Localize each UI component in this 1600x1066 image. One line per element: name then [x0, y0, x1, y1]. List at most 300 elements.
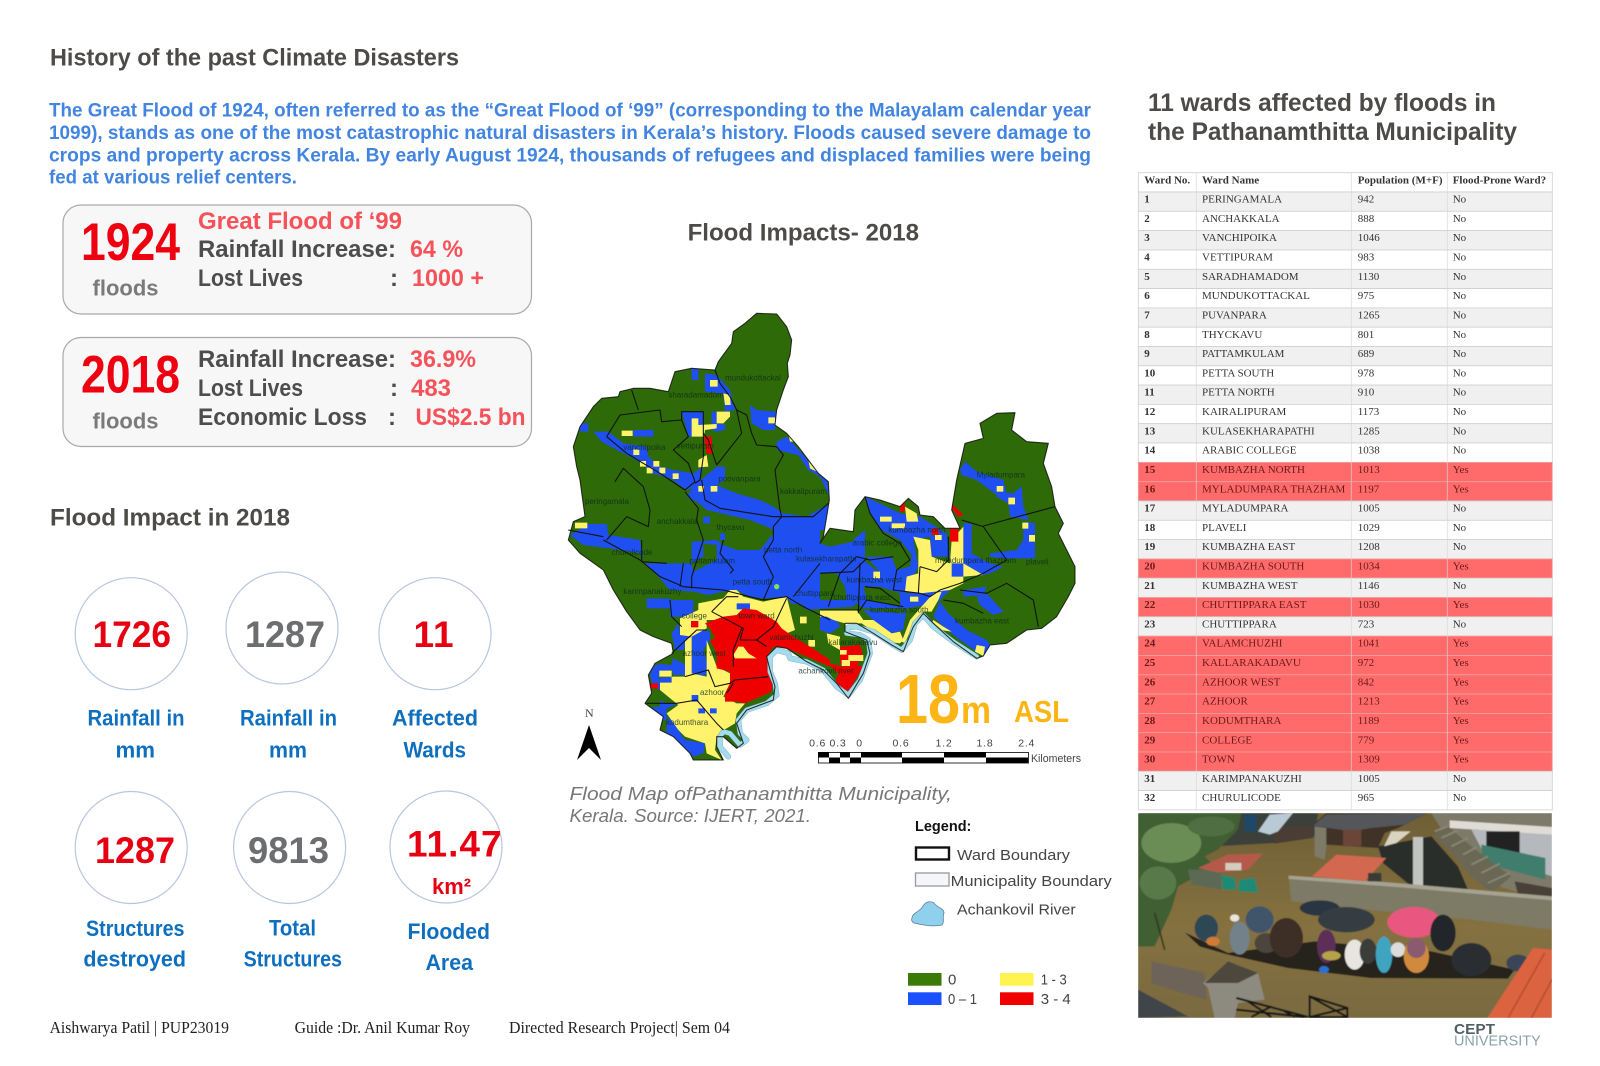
- panel: 2018 floods: :: [390, 375, 398, 402]
- row: ward 31: No: [1453, 773, 1467, 785]
- row: ward 1: No: [1453, 194, 1467, 206]
- row: ward 2: No: [1453, 213, 1467, 225]
- row: ward 12: No: [1453, 406, 1467, 418]
- legend: map symbols: Legend:: [915, 819, 971, 835]
- map: ward labels: chuttippara east: [833, 593, 891, 602]
- row: ward 20: [1138, 559, 1552, 578]
- heading: 11 wards affected: 11 wards affected by floods in: [1148, 89, 1496, 117]
- panel: 1924 floods: floods: [92, 276, 158, 300]
- map: ward labels: vanchipoika: [623, 443, 666, 452]
- logo: CEPT University: CEPT: [1454, 1021, 1495, 1038]
- map: ward labels: azhoor west: [683, 649, 726, 658]
- row: ward 32: CHURULICODE: [1202, 792, 1281, 804]
- row: ward 21: 21: [1144, 580, 1155, 592]
- row: ward 17: MYLADUMPARA: [1202, 503, 1288, 515]
- row: ward 20: 1034: [1358, 561, 1380, 573]
- row: ward 9: [1138, 346, 1552, 366]
- text block: great flood intro paragraph: The Great Flood of 1924, often referred to as the “Great Flood of ‘99” (corresponding to the Malayalam calendar year: [49, 101, 1092, 122]
- row: ward 26: 842: [1358, 676, 1374, 688]
- map: ward labels: plaveli: [1026, 558, 1049, 567]
- stat: flooded area 11.47: Area: [426, 950, 474, 975]
- icon: north arrow: [577, 706, 601, 760]
- row: ward 16: [1138, 482, 1552, 501]
- row: ward 18: PLAVELI: [1202, 522, 1247, 534]
- row: ward 1: PERINGAMALA: [1202, 194, 1282, 206]
- legend item: municipality boundary: Municipality Boundary: [951, 873, 1112, 890]
- stat: total structures 9813: Total: [269, 916, 316, 940]
- map layer: 1-3 m yellow: [575, 380, 1035, 760]
- map: ward labels: kumbazha south: [870, 605, 929, 614]
- row: ward 11: No: [1453, 387, 1467, 399]
- row: ward 7: PUVANPARA: [1202, 309, 1267, 321]
- table: ward flood-prone status: [1138, 173, 1552, 810]
- map: ward labels: kulasekharapathi: [796, 555, 857, 564]
- map: ward labels: Myladumpara: [977, 470, 1026, 479]
- row: ward 3: No: [1453, 232, 1467, 244]
- row: ward 26: 26: [1144, 676, 1156, 688]
- map layer: 0-1 m blue: [570, 368, 1035, 757]
- row: ward 2: [1138, 211, 1552, 231]
- legend item: depth classes: 0 – 1: [948, 991, 977, 1008]
- row: ward 8: 801: [1358, 329, 1374, 341]
- row: ward 8: No: [1453, 329, 1467, 341]
- map: ward labels: karimpanakuzhy: [623, 587, 681, 596]
- row: ward 21: [1138, 578, 1552, 598]
- row: ward 32: No: [1453, 792, 1467, 804]
- row: ward 7: 1265: [1358, 309, 1380, 321]
- scale bar: 0.6: [809, 738, 826, 750]
- map: ward labels: valamchuzhi: [769, 633, 814, 642]
- row: ward 25: 972: [1358, 657, 1374, 669]
- row: ward 29: COLLEGE: [1202, 734, 1252, 746]
- row: ward 15: 15: [1144, 464, 1156, 476]
- row: ward 19: 1208: [1358, 541, 1380, 553]
- row: ward 13: KULASEKHARAPATHI: [1202, 425, 1315, 437]
- map: ward labels: kallarakadavu: [828, 638, 878, 647]
- map: flood depth layers: [560, 300, 1093, 767]
- row: ward 27: 1213: [1358, 696, 1380, 708]
- legend item: achankovil river: [912, 901, 1076, 926]
- logo: CEPT University: [1454, 1021, 1541, 1050]
- stat: structures destroyed 1287: 1287: [95, 830, 175, 871]
- map: ward labels: azhoor: [700, 688, 725, 697]
- row: ward 23: [1138, 617, 1552, 636]
- row: ward 31: [1138, 771, 1552, 791]
- row: ward 18: No: [1453, 522, 1467, 534]
- row: ward 17: No: [1453, 503, 1467, 515]
- stat: affected wards 11: Wards: [404, 738, 466, 763]
- row: ward 28: KODUMTHARA: [1202, 715, 1282, 727]
- panel: 2018 floods: Lost Lives: [198, 375, 303, 402]
- panel: 2018 floods: Economic Loss: [198, 404, 367, 431]
- map: ward labels: anchakkala: [657, 517, 698, 526]
- row: ward 20: Yes: [1453, 561, 1469, 573]
- row: ward 2: ANCHAKKALA: [1202, 213, 1280, 225]
- row: ward 30: TOWN: [1202, 754, 1235, 766]
- map: ward labels: kakkalipuram: [780, 487, 827, 496]
- row: ward 14: 1038: [1358, 445, 1380, 457]
- map: blue cells over yellow: [660, 563, 963, 713]
- panel: 2018 floods: 2018: [81, 346, 180, 405]
- footer credits: Directed Research Project| Sem 04: [509, 1018, 730, 1037]
- row: ward 27: Yes: [1453, 696, 1469, 708]
- row: ward 23: CHUTTIPPARA: [1202, 618, 1277, 630]
- row: ward 21: No: [1453, 580, 1467, 592]
- map: ward labels: college: [682, 612, 708, 621]
- row: ward 30: 1309: [1358, 754, 1380, 766]
- row: ward 7: 7: [1144, 309, 1150, 321]
- row: ward 5: 5: [1144, 271, 1150, 283]
- legend item: ward boundary: Ward Boundary: [957, 847, 1071, 864]
- panel: 2018 floods: floods: [92, 408, 158, 434]
- legend item: depth classes: [908, 971, 1071, 1008]
- row: ward 4: [1138, 250, 1552, 269]
- legend item: depth classes: 1 - 3: [1041, 971, 1067, 988]
- map: ward labels: vettipuram: [677, 441, 714, 450]
- row: ward 22: Yes: [1453, 599, 1469, 611]
- heading: 11 wards affected: the Pathanamthitta Municipality: [1148, 118, 1517, 146]
- row: ward 16: 16: [1144, 483, 1156, 495]
- map layer: 3-4 m red: [650, 437, 963, 703]
- row: ward 24: 1041: [1358, 638, 1380, 650]
- table header: Ward No.: [1144, 174, 1190, 186]
- heading: 11 wards affected: [1148, 89, 1517, 146]
- map: ward labels: churulicode: [612, 548, 653, 557]
- row: ward 13: 13: [1144, 425, 1156, 437]
- row: ward 20: 20: [1144, 561, 1156, 573]
- row: ward 10: No: [1453, 367, 1467, 379]
- row: ward 8: THYCKAVU: [1202, 329, 1262, 341]
- row: ward 8: 8: [1144, 329, 1150, 341]
- row: ward 24: VALAMCHUZHI: [1202, 638, 1283, 650]
- stat: rainfall 1726: Rainfall in: [88, 706, 184, 731]
- panel: 1924 floods: :: [390, 265, 398, 292]
- row: ward 17: 1005: [1358, 503, 1380, 515]
- stat: rainfall 1287: 1287: [245, 614, 325, 655]
- stat: flooded area 11.47: [390, 791, 503, 975]
- map: ward labels: thycavu: [717, 523, 744, 532]
- row: ward 5: 1130: [1358, 271, 1380, 283]
- callout: 18m ASL elevation: ASL: [1014, 694, 1069, 729]
- row: ward 32: [1138, 791, 1552, 810]
- stat: rainfall 1726: mm: [116, 738, 155, 763]
- row: ward 19: 19: [1144, 541, 1156, 553]
- map: ward labels: peringamala: [585, 497, 630, 506]
- row: ward 20: KUMBAZHA SOUTH: [1202, 561, 1304, 573]
- row: ward 18: 1029: [1358, 522, 1380, 534]
- stat: structures destroyed 1287: Structures: [86, 916, 184, 941]
- heading: flood impacts 2018: Flood Impacts- 2018: [688, 220, 919, 247]
- row: ward 26: Yes: [1453, 676, 1469, 688]
- row: ward 28: [1138, 713, 1552, 733]
- row: ward 31: 31: [1144, 773, 1155, 785]
- row: ward 9: 9: [1144, 348, 1150, 360]
- photo: right building and stairs: [1431, 813, 1552, 896]
- map: yellow cells over red: [733, 647, 863, 666]
- stat: structures destroyed 1287: [75, 792, 187, 972]
- map: ward labels: petta south: [733, 577, 772, 586]
- row: ward 21: 1146: [1358, 580, 1380, 592]
- row: ward 4: 983: [1358, 252, 1375, 264]
- row: ward 7: [1138, 308, 1552, 327]
- row: ward 14: ARABIC COLLEGE: [1202, 445, 1297, 457]
- panel: 2018 floods: US$2.5 bn: [416, 404, 526, 431]
- row: ward 8: [1138, 327, 1552, 346]
- map: ward labels: myladumpara thazham: [935, 556, 1017, 565]
- row: ward 11: 11: [1144, 387, 1155, 399]
- footer credits: Guide :Dr. Anil Kumar Roy: [295, 1018, 471, 1037]
- panel: 2018 floods: 36.9%: [410, 346, 476, 373]
- stat: affected wards 11: 11: [414, 614, 455, 655]
- row: ward 27: 27: [1144, 696, 1156, 708]
- row: ward 5: No: [1453, 271, 1467, 283]
- row: ward 28: 28: [1144, 715, 1156, 727]
- footer credits: [50, 1018, 730, 1037]
- row: ward 29: Yes: [1453, 734, 1469, 746]
- row: ward 31: 1005: [1358, 773, 1380, 785]
- legend item: achankovil river: Achankovil River: [957, 901, 1076, 918]
- scale bar: Kilometers: [1031, 753, 1081, 765]
- legend: map symbols: [908, 819, 1112, 1008]
- map: ward labels: pattamkulam: [689, 556, 735, 565]
- row: ward 15: 1013: [1358, 464, 1380, 476]
- photo: umbrellas: [1300, 900, 1340, 916]
- table header: Flood-Prone Ward?: [1453, 174, 1546, 186]
- row: ward 10: PETTA SOUTH: [1202, 367, 1274, 379]
- row: ward 27: AZHOOR: [1202, 696, 1248, 708]
- scale bar: 0.6: [892, 738, 910, 750]
- row: ward 21: KUMBAZHA WEST: [1202, 580, 1298, 592]
- stat: rainfall 1287: mm: [269, 738, 307, 763]
- map: flood depth map of Pathanamthitta: [560, 300, 1093, 767]
- photo: people evacuated by boat in flooded street: [1138, 813, 1552, 1018]
- row: ward 22: 22: [1144, 599, 1156, 611]
- row: ward 6: No: [1453, 290, 1467, 302]
- map: ward labels: arabic college: [853, 539, 902, 548]
- row: ward 14: [1138, 443, 1552, 462]
- row: ward 25: Yes: [1453, 657, 1469, 669]
- panel: 1924 floods: 64 %: [410, 236, 463, 263]
- row: ward 25: [1138, 656, 1552, 675]
- stat: total structures 9813: 9813: [248, 830, 329, 871]
- map: marker dot: [774, 584, 779, 589]
- row: ward 26: [1138, 675, 1552, 694]
- row: ward 19: KUMBAZHA EAST: [1202, 541, 1295, 553]
- row: ward 12: KAIRALIPURAM: [1202, 406, 1287, 418]
- map: ward labels: kumbazha north: [888, 526, 946, 535]
- row: ward 23: 23: [1144, 618, 1156, 630]
- caption: flood map source: Flood Map ofPathanamthitta Municipality,: [570, 783, 952, 804]
- scale bar: [809, 738, 1081, 765]
- row: ward 10: 10: [1144, 367, 1156, 379]
- map: south-west blue patches: [650, 623, 710, 757]
- row: ward 1: [1138, 192, 1552, 211]
- text block: great flood intro paragraph: 1099), stands as one of the most catastrophic natural disasters in Kerala’s history. Floods caused severe damage to: [49, 123, 1091, 144]
- scale bar: 2.4: [1018, 738, 1035, 750]
- stat: flooded area 11.47: 11.47: [407, 824, 503, 865]
- row: ward 27: [1138, 694, 1552, 713]
- panel: 1924 floods: 1000 +: [412, 265, 484, 292]
- row: ward 9: No: [1453, 348, 1467, 360]
- scale bar: 1.2: [936, 738, 952, 750]
- row: ward 19: [1138, 540, 1552, 559]
- map: ward labels: kumbazha west: [847, 575, 903, 584]
- photo: trees: [1138, 813, 1241, 946]
- panel: 1924 floods: Rainfall Increase:: [198, 236, 396, 263]
- scale bar: 0.3: [830, 738, 846, 750]
- row: ward 18: [1138, 520, 1552, 540]
- map: zero-depth patches over blue: [648, 503, 912, 732]
- map: east blue patches: [820, 462, 1035, 656]
- row: ward 25: 25: [1144, 657, 1156, 669]
- row: ward 16: Yes: [1453, 483, 1469, 495]
- row: ward 30: [1138, 752, 1552, 771]
- panel: 1924 floods: Lost Lives: [198, 265, 303, 292]
- panel: 1924 floods: [63, 205, 532, 314]
- row: ward 24: Yes: [1453, 638, 1469, 650]
- row: ward 4: 4: [1144, 252, 1150, 264]
- stat: rainfall 1287: Rainfall in: [240, 706, 337, 731]
- row: ward 4: No: [1453, 252, 1467, 264]
- map: ward labels: petta north: [764, 546, 802, 555]
- row: ward 11: 910: [1358, 387, 1375, 399]
- stat: total structures 9813: [234, 792, 346, 972]
- row: ward 3: 3: [1144, 232, 1150, 244]
- text block: great flood intro paragraph: crops and property across Kerala. By early August 1924, thousands of refugees and displaced families were being: [49, 146, 1091, 167]
- row: ward 3: [1138, 231, 1552, 250]
- stat: rainfall 1287: [226, 572, 338, 763]
- row: ward 4: VETTIPURAM: [1202, 252, 1273, 264]
- photo: distant building: [1211, 813, 1318, 846]
- row: ward 6: 975: [1358, 290, 1375, 302]
- panel: flood impact statistics: [75, 572, 503, 975]
- row: ward 16: 1197: [1358, 483, 1380, 495]
- photo: orange roof: [1487, 948, 1552, 1018]
- row: ward 15: [1138, 462, 1552, 482]
- row: ward 9: 689: [1358, 348, 1375, 360]
- row: ward 1: 942: [1358, 194, 1374, 206]
- panel: 1924 floods: Great Flood of ‘99: [198, 208, 402, 235]
- row: ward 28: 1189: [1358, 715, 1380, 727]
- panel: 2018 floods: :: [388, 404, 396, 431]
- scale bar: 1.8: [976, 738, 994, 750]
- row: ward 23: 723: [1358, 618, 1375, 630]
- map: ward labels: achankovil river: [798, 666, 854, 675]
- map: ward labels: kodumthara: [666, 718, 709, 727]
- callout: 18m ASL elevation: 18: [896, 660, 960, 738]
- row: ward 22: CHUTTIPPARA EAST: [1202, 599, 1307, 611]
- text block: great flood intro paragraph: fed at various relief centers.: [49, 168, 297, 188]
- row: ward 9: PATTAMKULAM: [1202, 348, 1285, 360]
- row: ward 1: 1: [1144, 194, 1150, 206]
- row: ward 15: KUMBAZHA NORTH: [1202, 464, 1305, 476]
- row: ward 15: Yes: [1453, 464, 1469, 476]
- row: ward 31: KARIMPANAKUZHI: [1202, 773, 1302, 785]
- map: ward labels: chuttippara: [795, 589, 835, 598]
- row: ward 14: No: [1453, 445, 1467, 457]
- stat: total structures 9813: Structures: [244, 947, 342, 972]
- callout: 18m ASL elevation: [896, 660, 1069, 738]
- row: ward 11: [1138, 385, 1552, 404]
- row: ward 5: SARADHAMADOM: [1202, 271, 1299, 283]
- panel: 2018 floods: 483: [411, 375, 451, 402]
- photo: roofs and low walls: [1188, 870, 1221, 890]
- photo: boat: [1185, 932, 1515, 979]
- table header: Ward Name: [1202, 174, 1259, 186]
- legend item: depth classes: 0: [948, 971, 956, 988]
- row: ward 26: AZHOOR WEST: [1202, 676, 1281, 688]
- caption: flood map source: [570, 783, 952, 826]
- row: ward 29: 779: [1358, 734, 1375, 746]
- row: ward 19: No: [1453, 541, 1467, 553]
- row: ward 5: [1138, 269, 1552, 289]
- footer credits: Aishwarya Patil | PUP23019: [50, 1018, 229, 1037]
- map: ward labels: mundukottackal: [725, 374, 781, 383]
- row: ward 25: KALLARAKADAVU: [1202, 657, 1301, 669]
- heading: flood impact in 2018: Flood Impact in 2018: [50, 505, 290, 532]
- row: ward 17: 17: [1144, 503, 1156, 515]
- row: ward 22: [1138, 598, 1552, 617]
- stat: flooded area 11.47: Flooded: [408, 919, 490, 944]
- row: ward 6: 6: [1144, 290, 1150, 302]
- row: ward 2: 888: [1358, 213, 1375, 225]
- row: ward 7: No: [1453, 309, 1467, 321]
- row: ward 16: MYLADUMPARA THAZHAM: [1202, 483, 1346, 495]
- row: ward 17: [1138, 501, 1552, 520]
- panel: 1924 floods: 1924: [81, 213, 180, 272]
- row: ward 18: 18: [1144, 522, 1156, 534]
- text block: great flood intro paragraph: [49, 101, 1092, 188]
- row: ward 2: 2: [1144, 213, 1150, 225]
- legend item: depth classes: 3 - 4: [1041, 991, 1071, 1008]
- row: ward 29: 29: [1144, 734, 1156, 746]
- row: ward 12: [1138, 404, 1552, 424]
- row: ward 3: 1046: [1358, 232, 1380, 244]
- panel: 2018 floods: [63, 338, 532, 446]
- map: ward labels: sharadamadom: [668, 390, 724, 399]
- river: Achankovil: [720, 615, 977, 757]
- map: ward labels: town ward: [738, 612, 775, 621]
- stat: rainfall 1726: 1726: [92, 614, 171, 655]
- stat: affected wards 11: [379, 578, 491, 763]
- title: history of the past climate disasters: History of the past Climate Disasters: [50, 45, 459, 72]
- photo: foreground wall, gate and fence: [1151, 961, 1206, 1000]
- map: ward labels: poovanpara: [718, 475, 761, 484]
- callout: 18m ASL elevation: m: [961, 690, 991, 732]
- row: ward 3: VANCHIPOIKA: [1202, 232, 1277, 244]
- row: ward 13: No: [1453, 425, 1467, 437]
- row: ward 10: [1138, 366, 1552, 385]
- row: ward 29: [1138, 733, 1552, 752]
- icon: north arrow: N: [585, 706, 594, 720]
- row: ward 12: 12: [1144, 406, 1156, 418]
- row: ward 13: [1138, 424, 1552, 443]
- logo: CEPT University: UNIVERSITY: [1454, 1033, 1541, 1050]
- row: ward 6: [1138, 289, 1552, 308]
- photo: passengers: [1195, 915, 1218, 941]
- row: ward 32: 32: [1144, 792, 1156, 804]
- map: ward labels: [585, 374, 1049, 727]
- row: ward 10: 978: [1358, 367, 1375, 379]
- row: ward 23: No: [1453, 618, 1467, 630]
- row: ward 24: [1138, 636, 1552, 655]
- stat: affected wards 11: Affected: [392, 706, 478, 731]
- panel: 2018 floods: Rainfall Increase:: [198, 346, 396, 373]
- row: ward 6: MUNDUKOTTACKAL: [1202, 290, 1310, 302]
- table header: Population (M+F): [1358, 174, 1443, 186]
- row: ward 11: PETTA NORTH: [1202, 387, 1275, 399]
- stat: flooded area 11.47: km²: [432, 874, 471, 899]
